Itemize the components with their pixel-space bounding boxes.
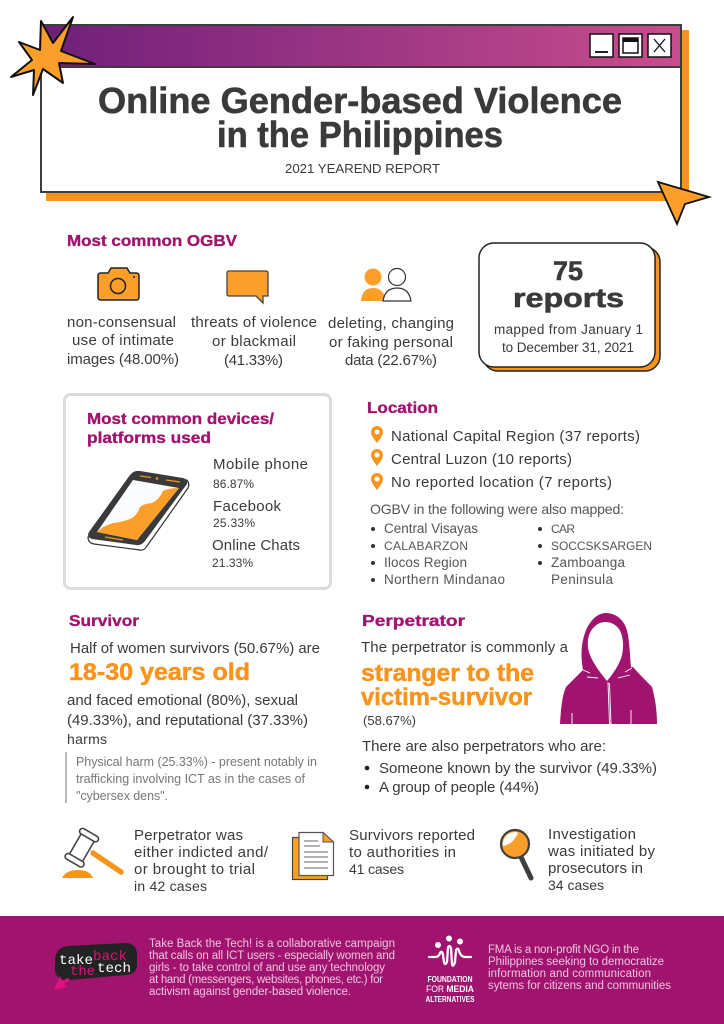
highlight: age: 18-30 years old <box>69 659 250 686</box>
highlight: stranger <box>361 660 534 711</box>
perpetrator list: Someone known by the survivor (49.33%) <box>379 760 657 777</box>
heading: Most common OGBV <box>67 233 237 250</box>
device stats <box>212 456 308 570</box>
text: harms <box>67 692 308 747</box>
footer <box>0 916 724 1024</box>
stat: reported <box>292 827 475 880</box>
text: take back the tech: at hand (messengers, websites, phones, etc.) for <box>149 974 383 986</box>
top locations <box>391 428 640 491</box>
big number: 75 <box>553 256 583 286</box>
note: physical harm: "cybersex dens". <box>76 789 168 803</box>
text: commonly: The perpetrator is commonly a <box>361 639 569 656</box>
text: was initiated by <box>547 843 656 860</box>
panel: 75 reports card <box>479 243 660 371</box>
other locations list: CAR <box>551 522 575 536</box>
text: to authorities in <box>349 844 456 861</box>
device stats: Mobile phone <box>213 456 308 473</box>
window buttons <box>590 34 671 57</box>
icon: people <box>361 268 411 301</box>
text: harms: harms <box>67 731 107 747</box>
text: FMA: Philippines seeking to democratize <box>488 956 664 968</box>
text: take back the tech <box>149 938 395 998</box>
text: deleting: data (22.67%) <box>345 352 437 369</box>
icon: phone <box>88 471 189 550</box>
device stats: Facebook <box>213 498 282 515</box>
text: or brought to trial <box>134 861 255 878</box>
stat: investigation <box>501 826 656 893</box>
icon: magnifier <box>501 830 531 878</box>
panel: perpetrator <box>361 613 657 796</box>
other locations list: Peninsula <box>551 572 613 587</box>
other locations intro: OGBV in the following were also mapped: <box>370 501 624 517</box>
logo: take back the tech <box>54 943 137 990</box>
panel: 75 reports card: reports <box>513 283 624 313</box>
text: threats: or blackmail <box>212 333 296 350</box>
note: physical harm: Physical harm (25.33%) - present notably in <box>76 755 317 769</box>
text: take back the tech: that calls on all ICT users - especially women and <box>149 950 395 962</box>
text: deleting: or faking personal <box>329 334 453 351</box>
text <box>547 826 656 893</box>
other locations list: Ilocos Region <box>384 555 467 570</box>
text: take back the tech: girls - to take control of and use any technology <box>149 962 385 974</box>
text: harms: (49.33%), and reputational (37.33%) <box>67 712 308 729</box>
text: FMA <box>488 944 671 992</box>
icon: document <box>292 832 334 880</box>
text <box>349 827 475 877</box>
text <box>134 827 269 894</box>
perpetrator list: A group of people (44%) <box>379 779 539 796</box>
icon: cursor arrow <box>658 182 709 224</box>
text: either indicted and/ <box>134 844 269 861</box>
other locations list <box>371 521 652 587</box>
other locations list: CALABARZON <box>384 539 468 553</box>
percent: (58.67%) <box>363 713 416 728</box>
title: Online Gender-based Violence <box>98 80 622 121</box>
perpetrator list <box>365 760 657 796</box>
text: FMA: sytems for citizens and communities <box>488 980 671 992</box>
caption: mapped from January 1 <box>494 322 643 337</box>
logo: foundation for media alternatives: ALTERNATIVES <box>426 995 475 1004</box>
note: physical harm <box>65 752 317 803</box>
heading: Most common devices/ <box>87 411 275 428</box>
stat: indicted <box>62 827 269 894</box>
text: deleting <box>328 315 454 369</box>
text: prosecutors in <box>548 860 643 877</box>
other locations list: Northern Mindanao <box>384 572 505 587</box>
panel: devices and platforms <box>64 394 330 588</box>
text: threats: (41.33%) <box>224 352 283 369</box>
heading: platforms used <box>87 430 211 447</box>
heading: Location <box>367 400 438 417</box>
text: harms: and faced emotional (80%), sexual <box>67 692 298 709</box>
logo: foundation for media alternatives: FOUNDATION <box>428 975 473 984</box>
panel: 75 reports card: to December 31, 2021 <box>502 340 634 355</box>
icons: location pins <box>371 426 383 490</box>
subtitle: 2021 YEAREND REPORT <box>285 161 440 176</box>
panel: most common OGBV <box>67 233 454 369</box>
heading <box>87 411 275 447</box>
logo: foundation for media alternatives <box>426 936 475 1004</box>
other locations list: Central Visayas <box>384 521 478 536</box>
device stats: Online Chats <box>212 537 300 554</box>
text: Investigation <box>548 826 636 843</box>
logo: take back the tech: take <box>59 953 93 969</box>
text: non-consensual: non-consensual <box>67 314 176 331</box>
text: FMA: FMA is a non-profit NGO in the <box>488 944 639 956</box>
title <box>98 80 622 155</box>
icon: star burst <box>11 17 95 95</box>
title bar <box>41 25 681 67</box>
text: non-consensual: images (48.00%) <box>67 351 179 368</box>
note: physical harm: trafficking involving ICT as in the cases of <box>76 772 306 786</box>
panel: survivor <box>65 613 320 803</box>
icon: hooded figure <box>560 613 657 724</box>
heading: Perpetrator <box>362 613 465 630</box>
header window <box>41 25 689 201</box>
heading: Survivor <box>69 613 139 630</box>
text: 41 cases <box>349 861 404 877</box>
other locations list: Zamboanga <box>551 555 625 570</box>
text: half of women: Half of women survivors (50.67%) are <box>70 640 320 657</box>
top locations: Central Luzon (10 reports) <box>391 451 572 468</box>
logo: take back the tech: back <box>93 949 127 965</box>
text: take back the tech: Take Back the Tech! is a collaborative campaign <box>149 938 395 950</box>
text: deleting: deleting, changing <box>328 315 454 332</box>
logo: take back the tech: the <box>70 964 95 980</box>
other locations list: SOCCSKSARGEN <box>551 539 652 553</box>
text: threats: threats of violence <box>191 314 317 331</box>
highlight: stranger: victim-survivor <box>361 684 532 711</box>
text: in 42 cases <box>134 878 207 894</box>
logo: take back the tech: tech <box>97 961 131 977</box>
text: also perpetrators: There are also perpetrators who are: <box>362 738 606 755</box>
device stats: 86.87% <box>213 477 254 491</box>
text: 34 cases <box>548 877 604 893</box>
device stats: 21.33% <box>212 556 253 570</box>
device stats: 25.33% <box>213 516 255 530</box>
text: FMA: information and communication <box>488 968 651 980</box>
top locations: National Capital Region (37 reports) <box>391 428 640 445</box>
text: non-consensual <box>67 314 179 368</box>
title: in the Philippines <box>217 114 503 155</box>
panel: location <box>367 400 652 587</box>
text: take back the tech: activism against gender-based violence. <box>149 986 351 998</box>
text: threats <box>191 314 317 369</box>
icon: gavel <box>62 827 121 878</box>
top locations: No reported location (7 reports) <box>391 474 612 491</box>
logo: foundation for media alternatives: FOR MEDIA <box>426 984 474 994</box>
icon: camera <box>98 268 139 300</box>
highlight: stranger: stranger to the <box>361 660 534 687</box>
text: Survivors reported <box>349 827 475 844</box>
icon: speech bubble <box>227 271 268 303</box>
text: non-consensual: use of intimate <box>72 332 174 349</box>
text: Perpetrator was <box>134 827 243 844</box>
